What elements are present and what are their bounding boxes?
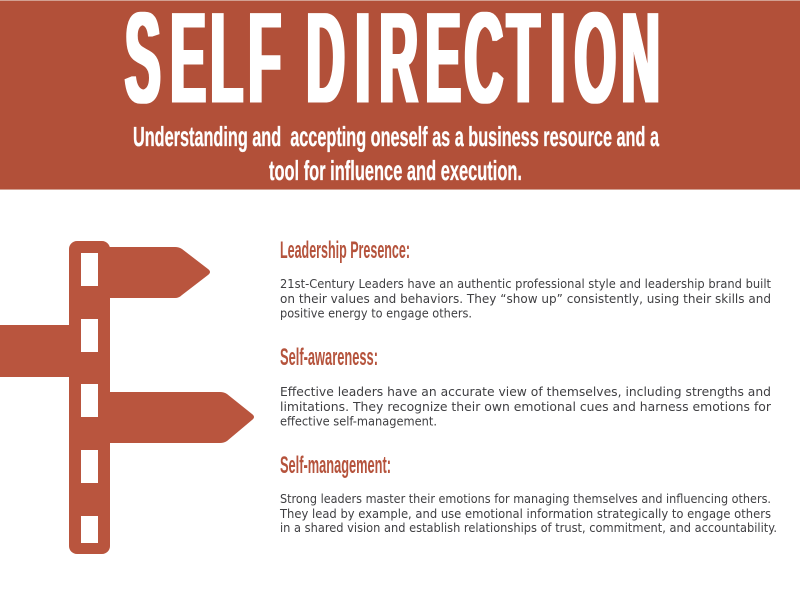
heading: Self-awareness: xyxy=(280,344,378,371)
body text: 21st-Century Leaders have an authentic professional style and leadership brand built xyxy=(280,276,771,291)
body text: positive energy to engage others. xyxy=(280,306,472,320)
heading: Leadership Presence: xyxy=(280,237,410,264)
body text: They lead by example, and use emotional information strategically to engage others xyxy=(279,506,771,521)
body text: on their values and behaviors. They “show up” consistently, using their skills and xyxy=(280,291,771,306)
section: leadership presence xyxy=(280,237,771,320)
body text xyxy=(280,276,771,320)
section: self-management xyxy=(279,452,777,535)
subtitle: tool for influence and execution. xyxy=(269,155,522,186)
body text xyxy=(279,491,777,535)
section: self-awareness xyxy=(280,344,772,428)
icon: signpost xyxy=(0,241,254,554)
body text: Effective leaders have an accurate view of themselves, including strengths and xyxy=(280,384,771,399)
body text: effective self-management. xyxy=(280,414,437,428)
header banner xyxy=(0,0,800,190)
heading: Self-management: xyxy=(280,452,391,479)
subtitle xyxy=(133,121,659,186)
body text: limitations. They recognize their own emotional cues and harness emotions for xyxy=(280,399,772,414)
body text xyxy=(280,384,772,428)
